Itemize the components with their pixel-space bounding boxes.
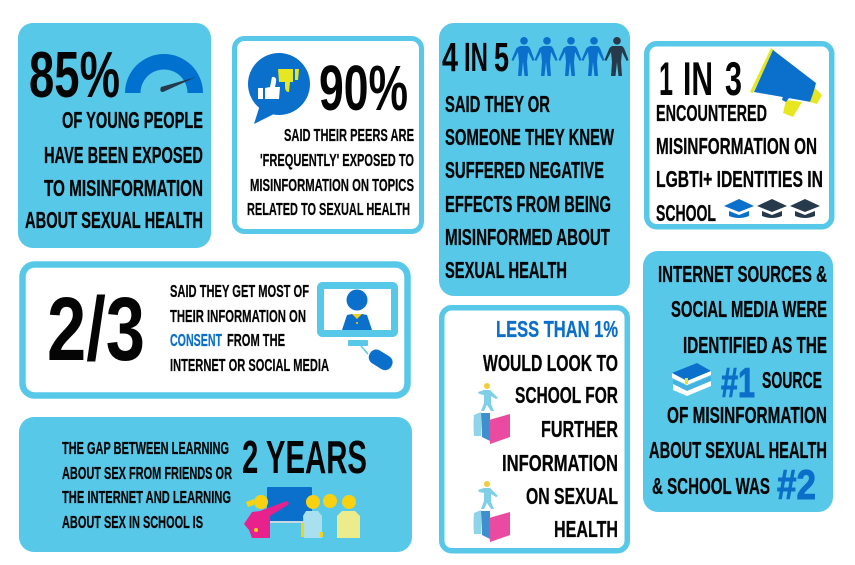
text: consent information: SAID THEY GET MOST OF	[170, 281, 309, 301]
icon: megaphone	[750, 48, 822, 117]
heading: less than 1%: LESS THAN 1%	[496, 316, 618, 342]
text: consent information: CONSENT	[170, 330, 222, 350]
statistic: 4 in 5	[442, 34, 509, 80]
text: of young people	[25, 107, 203, 233]
icon: classroom with teacher and students	[244, 487, 360, 538]
text: gap between learning: ABOUT SEX FROM FRIENDS OR	[62, 463, 232, 483]
text: of young people: OF YOUNG PEOPLE	[62, 107, 203, 133]
text: of young people: ABOUT SEXUAL HEALTH	[25, 207, 203, 233]
panel: 1 in 3	[647, 44, 832, 227]
statistic: 2/3: 2/3	[47, 280, 145, 380]
text: gap between learning: THE GAP BETWEEN LEARNING	[62, 438, 229, 458]
text: peers frequently exposed: RELATED TO SEXUAL HEALTH	[247, 199, 410, 219]
text: peers frequently exposed: 'FREQUENTLY' EXPOSED TO	[260, 150, 414, 170]
icon: stack of books	[672, 363, 711, 396]
text: would look to school: ON SEXUAL	[526, 483, 618, 509]
text: consent information: INTERNET OR SOCIAL MEDIA	[170, 355, 329, 375]
icon: gauge	[125, 54, 203, 93]
panel: 90% peers exposed	[234, 38, 422, 232]
text: gap between learning: THE INTERNET AND LEARNING	[62, 487, 231, 507]
text: source of misinformation: & SCHOOL WAS	[652, 473, 770, 499]
text: encountered misinformation: ENCOUNTERED	[656, 100, 767, 126]
text: suffered negative effects	[445, 91, 614, 283]
statistic: 4 in 5: 5	[494, 34, 509, 80]
statistic: 1 in 3: IN	[683, 52, 713, 105]
text: consent information: THEIR INFORMATION ON	[170, 306, 306, 326]
statistic: 4 in 5: 4	[442, 34, 458, 80]
text: would look to school: WOULD LOOK TO	[483, 350, 618, 376]
panel: 2/3 consent	[22, 264, 408, 396]
icon: five people	[512, 37, 628, 76]
panel: less than 1%	[442, 308, 627, 551]
text: would look to school: FURTHER	[541, 416, 618, 442]
text: of young people: HAVE BEEN EXPOSED	[44, 142, 203, 168]
text: peers frequently exposed: MISINFORMATION ON TOPICS	[250, 175, 414, 195]
statistic: 1 in 3: 3	[725, 52, 742, 105]
text: would look to school	[483, 350, 618, 542]
text: suffered negative effects: SAID THEY OR	[445, 91, 550, 117]
text: peers frequently exposed	[247, 125, 414, 219]
icon: computer with person and mouse	[320, 286, 395, 373]
text: source of misinformation	[649, 367, 827, 499]
text: internet sources identified	[658, 261, 827, 358]
text: suffered negative effects: MISINFORMED ABOUT	[445, 224, 610, 250]
statistic: 85%: 85%	[29, 38, 120, 111]
statistic: 1 in 3: 1	[659, 52, 673, 105]
icon: figure climbing books	[474, 383, 510, 444]
icon: speech bubble with thumbs	[248, 53, 310, 124]
statistic: 4 in 5: IN	[464, 34, 488, 80]
text: suffered negative effects: EFFECTS FROM BEING	[445, 191, 611, 217]
panel: 4 in 5	[439, 23, 630, 296]
text: suffered negative effects: SEXUAL HEALTH	[445, 257, 567, 283]
text: #2: #2	[777, 461, 816, 508]
icon: graduation caps	[724, 199, 820, 218]
text: peers frequently exposed: SAID THEIR PEERS ARE	[284, 125, 414, 145]
text: of young people: TO MISINFORMATION	[44, 175, 203, 201]
text: gap between learning	[62, 438, 232, 532]
text: gap between learning: ABOUT SEX IN SCHOOL IS	[62, 512, 203, 532]
text: would look to school: SCHOOL FOR	[515, 382, 618, 408]
text: suffered negative effects: SUFFERED NEGATIVE	[445, 157, 604, 183]
icon: figure climbing books	[474, 481, 510, 542]
panel: 2 years gap	[19, 417, 412, 552]
text: would look to school: INFORMATION	[502, 450, 618, 476]
panel: internet sources	[643, 251, 833, 512]
text: encountered misinformation: SCHOOL	[656, 200, 716, 226]
statistic: 2 years: 2 YEARS	[242, 431, 367, 483]
text: consent information	[170, 281, 329, 375]
statistic: 1 in 3	[659, 52, 742, 105]
text: suffered negative effects: SOMEONE THEY KNEW	[445, 124, 614, 150]
text: encountered misinformation	[656, 100, 823, 226]
text: would look to school: HEALTH	[554, 516, 618, 542]
text: consent information: FROM THE	[227, 330, 285, 350]
statistic: 90%: 90%	[319, 52, 408, 124]
text: #1: #1	[721, 359, 755, 406]
panel: 85% exposed to misinformation	[18, 23, 211, 248]
